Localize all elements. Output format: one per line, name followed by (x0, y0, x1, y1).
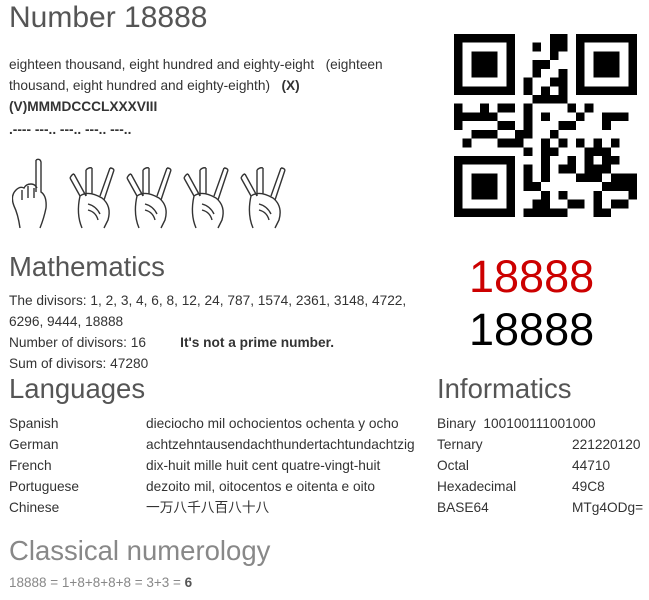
text block: number in words: (V)MMMDCCCLXXXVIII (9, 99, 157, 114)
informatics table: MTg4ODg= (572, 500, 643, 515)
heading: Classical numerology: Classical numerology (9, 535, 270, 566)
informatics table: 221220120 (572, 437, 641, 452)
informatics table (437, 416, 643, 515)
heading: Mathematics: Mathematics (9, 251, 165, 282)
big number red: 18888 (469, 251, 594, 302)
informatics table: 49C8 (572, 479, 605, 494)
QR code (454, 34, 637, 217)
text block: divisors (9, 293, 406, 371)
icon: sign language hands (12, 158, 286, 228)
text block: divisors: 6296, 9444, 18888 (9, 314, 123, 329)
languages table: Portuguese (9, 479, 79, 494)
languages table: achtzehntausendachthundertachtundachtzig (146, 437, 415, 452)
informatics table: Hexadecimal (437, 479, 516, 494)
languages table: Chinese (9, 500, 59, 515)
heading: Languages: Languages (9, 373, 145, 404)
title: Number 18888 (9, 1, 207, 34)
languages table: French (9, 458, 52, 473)
languages table: German (9, 437, 58, 452)
informatics table: BASE64 (437, 500, 489, 515)
big number black: 18888 (469, 304, 594, 355)
languages table: dezoito mil, oitocentos e oitenta e oito (146, 479, 375, 494)
informatics table: Ternary (437, 437, 483, 452)
heading: Informatics: Informatics (437, 373, 571, 404)
text block: number in words (9, 57, 383, 114)
numerology calculation: 18888 = 1+8+8+8+8 = 3+3 = 6 (9, 575, 192, 590)
text block: divisors: Number of divisors: 16 It's not a prime number. (9, 335, 334, 350)
languages table (9, 416, 415, 515)
languages table: 一万八千八百八十八 (146, 500, 269, 515)
informatics table: Octal (437, 458, 469, 473)
text block: divisors: Sum of divisors: 47280 (9, 356, 148, 371)
languages table: dix-huit mille huit cent quatre-vingt-huit (146, 458, 380, 473)
text block: number in words: eighteen thousand, eight hundred and eighty-eight (eighteen thousand, eight hundred and eighty-eighth) (X) (9, 57, 383, 93)
text block: divisors: The divisors: 1, 2, 3, 4, 6, 8, 12, 24, 787, 1574, 2361, 3148, 4722, (9, 293, 406, 308)
informatics table: Binary 100100111001000 (437, 416, 596, 431)
languages table: dieciocho mil ochocientos ochenta y ocho (146, 416, 399, 431)
morse code: .---- ---.. ---.. ---.. ---.. (9, 122, 131, 137)
informatics table: 44710 (572, 458, 610, 473)
languages table: Spanish (9, 416, 58, 431)
